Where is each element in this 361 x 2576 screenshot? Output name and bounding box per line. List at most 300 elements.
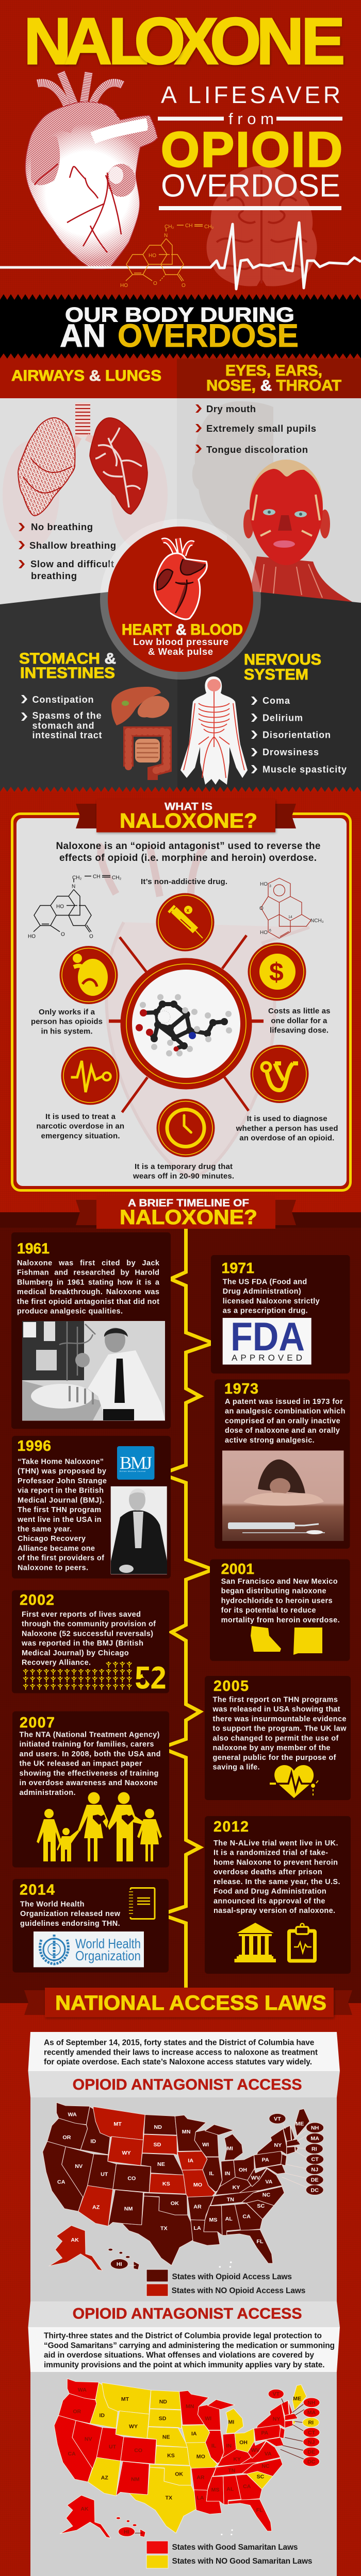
card: 2001: 2001 [221,1561,254,1578]
photo: professor [111,1486,167,1574]
card: 2014: Organization released new [20,1910,121,1918]
facts: narcotic overdose in an [36,1122,124,1130]
map: good samaritan: RI [308,2420,314,2426]
heading: AIRWAYS & LUNGS [11,367,161,384]
map: opioid access: SD [153,2143,161,2148]
text: good samaritan: aid in overdose situations. What offenses and violations are covered by [44,2351,314,2360]
card: 2005: general public for the purpose of [212,1754,336,1762]
faint heart backdrop [101,845,309,1177]
map: opioid access: CA [242,2214,251,2219]
facts [31,1007,338,1181]
faint head [192,401,273,592]
icon: heart [154,538,207,619]
card: 1961: the first opioid antagonist that did not [17,1298,159,1306]
map: opioid access: MT [113,2122,122,2127]
card: 1996: via report in the British [18,1487,104,1495]
facts: Costs as little as [268,1007,330,1015]
card: 1971: Drug Administration) [223,1287,301,1296]
text: access laws: recently amended their laws to increase access to naloxone as treatment [44,2048,318,2057]
facts: emergency situation. [41,1131,120,1141]
icon: naloxone structure: N [72,884,75,889]
ribbon: what is naloxone [76,800,296,833]
map: good samaritan: MA [307,2410,316,2416]
card: 2007: administration. [20,1789,75,1797]
map: good samaritan: ID [99,2413,105,2418]
card: 2007: 2007 [20,1715,55,1731]
map: good samaritan: MO [196,2454,205,2460]
faint lung shadow [3,440,168,549]
map: good samaritan: WI [205,2416,211,2422]
icon: morphine structure: 14 [288,916,292,919]
map: opioid access: AZ [92,2205,100,2210]
map: opioid access: LA [193,2226,201,2231]
map: good samaritan: NC [261,2464,270,2469]
map: opioid access: NC [262,2193,271,2198]
card: 1961 [11,1232,171,1429]
map: good samaritan: DC [307,2460,316,2465]
list: ENT symptoms: Extremely small pupils [206,423,316,434]
card: 2012: announced its approval of the [214,1897,325,1905]
map: good samaritan: SC [257,2475,265,2480]
divider with from: from [228,110,274,128]
heading: NERVOUS [244,651,321,668]
icon: nervous system body [180,676,248,785]
card: 2005: also changed to permit the use of [212,1734,338,1742]
map: opioid access: SC [257,2204,265,2209]
card: 1996: 1996 [18,1438,51,1454]
list: airway symptoms [19,521,116,581]
card: 1973: dose of naloxone and an orally [225,1427,340,1435]
map: opioid access: NV [75,2164,83,2170]
panel: nervous system [0,591,361,792]
intro text: effects of opioid (i.e. morphine and heroin) overdose. [59,853,317,863]
map: opioid access: ID [90,2139,96,2144]
card: 1996 [12,1436,171,1579]
map: good samaritan: KS [167,2453,175,2459]
icon: morphine structure: NCH₃ [310,918,324,924]
map: good samaritan: VA [265,2451,272,2457]
timeline spine [161,1229,213,1988]
logo: bmj [117,1446,155,1480]
facts: lifesaving dose. [270,1026,329,1035]
map: good samaritan: HI [124,2530,129,2535]
card: 2007: and users. In 2008, both the USA and [20,1750,161,1758]
map: opioid access: NH [311,2126,319,2131]
card: 2001: for its potential to reduce [221,1606,316,1615]
icon: california and new mexico [251,1626,322,1655]
card: 1961: Naloxone was first cited by Jack [17,1259,160,1267]
card: 2012: overdose deaths after prison [214,1868,322,1876]
text: access laws: for opiate overdose. Each state’s Naloxone access statutes vary widely. [44,2058,312,2066]
icon: naloxone molecule: HO [149,253,156,259]
list: nervous symptoms: Coma [262,696,290,706]
icon: naloxone structure: CH [93,874,100,880]
icon: morphine structure: O [259,906,264,911]
card: 1971 [211,1255,350,1374]
heading [19,650,116,682]
divider with from [158,110,342,128]
icon circle: syringe [156,893,215,951]
list: nervous symptoms: Drowsiness [262,747,319,757]
map: opioid access: MO [193,2182,202,2188]
icon: naloxone molecule: CH [185,223,192,229]
icon: naloxone structure: HO [56,904,64,910]
map: opioid access: DC [310,2188,319,2193]
card: 2014: The World Health [20,1900,85,1908]
ribbon: timeline: A BRIEF TIMELINE OF [128,1198,249,1209]
panel: what is naloxone [0,792,361,1212]
ribbon [24,1988,352,2018]
facts: Only works if a [39,1008,95,1016]
map: good samaritan: CA [243,2484,251,2490]
card: 2001: mortality from heroin overdose. [221,1616,340,1624]
title [24,5,345,78]
facts: one dollar for a [271,1016,327,1025]
map: good samaritan [54,2379,320,2538]
list: nervous symptoms: Delirium [262,713,303,723]
map: opioid access: WI [202,2143,209,2148]
icon: number 52 with heart: 52 [135,1660,166,1695]
card: 2014: guidelines endorsing THN. [20,1920,120,1928]
card: 1996: Chicago Recovery [18,1535,86,1543]
map: opioid access: MS [209,2217,218,2223]
icon: naloxone molecule: N [164,233,168,239]
panel: heart and blood circle [100,519,261,680]
map: good samaritan: MN [186,2404,194,2410]
map: opioid access: WV [251,2176,260,2181]
icon: morphine structure: 3 [269,885,271,888]
logo: fda approved: FDA [231,1314,305,1359]
card: 1996: “Take Home Naloxone” [18,1458,104,1466]
card: 2005: was released in USA showing that [212,1705,340,1714]
panel: stomach and intestines [0,591,177,792]
heading: OPIOID ANTAGONIST ACCESS [73,2076,302,2093]
map: good samaritan: ME [293,2396,301,2402]
card: 2002: Medical Journal) by Chicago [22,1649,129,1657]
card: 1973 [215,1380,350,1549]
card: map two [28,2301,340,2576]
card: 2001: hydrochloride to heroin users [221,1597,333,1605]
icon: lungs [18,402,147,516]
list: airway symptoms: Slow and difficult [30,558,114,569]
heading: NOSE, & THROAT [206,377,341,394]
list: nervous symptoms: Disorientation [262,730,331,740]
list: nervous symptoms: Muscle spasticity [262,765,347,775]
card: 2007: The NTA (National Treatment Agency) [20,1731,160,1739]
map: opioid access: WA [68,2112,77,2117]
text: symptoms: & Weak pulse [148,646,213,657]
card: 2002: Recovery Alliance. [22,1659,91,1667]
text: good samaritan: Thirty-three states and the District of Columbia provide legal protection to [44,2332,322,2340]
panel: eyes ears nose throat [177,353,361,604]
icon: clipboard [289,1924,315,1961]
map: good samaritan: CO [134,2448,142,2454]
map: opioid access: CO [127,2176,136,2181]
card: 1971: The US FDA (Food and [223,1278,307,1286]
card: 2005: naloxone by any member of the [212,1744,330,1752]
text: good samaritan: immunity provisions and the point at which immunity applies vary by state. [44,2361,325,2369]
icon: naloxone structure: CH₂ [72,875,81,881]
text: access laws: As of September 14, 2015, forty states and the District of Columbia have [44,2038,315,2047]
map: good samaritan: NY [273,2417,281,2422]
legend: opioid access: States with Opioid Access Laws [172,2273,292,2281]
connectors [109,936,264,1112]
logo: world health organization [34,1931,144,1967]
card: 2002 [12,1590,169,1695]
card: 1996: the same year. [18,1525,72,1533]
map: opioid access: DE [311,2178,319,2183]
icon: morphine structure: HO [260,930,268,936]
card: 1973: active strong analgesic. [225,1436,315,1445]
list: digestive symptoms: Spasms of the [32,710,101,721]
subtitle: opioid: OPIOID [161,122,342,177]
card: 2005: The first report on THN programs [212,1696,338,1704]
map: opioid access: AL [225,2217,233,2222]
map: good samaritan: NJ [308,2440,315,2445]
card: 2005 [205,1676,351,1800]
list: nervous symptoms [251,696,347,775]
ribbon: what is naloxone: WHAT IS [165,801,212,812]
card: 2012: release. In the same year, the U.S. [214,1878,340,1886]
map: good samaritan: OR [73,2410,81,2415]
map: good samaritan: CA [68,2452,76,2457]
card: 2012: 2012 [214,1819,249,1835]
icon: faint brain [206,166,317,286]
map: good samaritan: WY [129,2424,138,2430]
card: 1996: Naloxone to peers. [18,1564,88,1572]
panel: timeline [0,1196,361,2006]
photo: syringe and person [222,1451,343,1541]
facts: in his system. [41,1027,93,1036]
map: opioid access: TN [227,2197,234,2203]
card: 1973: 1973 [224,1381,258,1397]
map: opioid access: NJ [311,2167,318,2173]
map: opioid access: IN [225,2171,230,2177]
map: opioid access: VA [265,2179,273,2185]
map: opioid access: HI [117,2262,122,2267]
icon: digestive organs [111,687,169,780]
card: 1971: licensed Naloxone strictly [223,1297,320,1306]
card: 2002: First ever reports of lives saved [22,1611,141,1619]
icon circle: clock [157,1099,215,1157]
card: 2002: Naloxone (52 successful reversals) [22,1630,153,1638]
map: opioid access: OR [62,2135,71,2141]
panel: airways and lungs [0,353,177,604]
map: opioid access: MI [227,2146,233,2151]
title: N [24,5,71,78]
card: 2005: 2005 [214,1678,249,1694]
icon: naloxone structure: CH₂ [112,875,121,881]
icon: naloxone structure: O [89,934,93,940]
list: airway symptoms: Shallow breathing [29,540,116,551]
icon: naloxone molecule: O [153,281,157,286]
card: 1971: 1971 [222,1260,254,1277]
heading: EYES, EARS, [225,362,322,379]
heading [244,651,321,683]
map: good samaritan: FL [256,2508,263,2514]
map: opioid access: AK [71,2238,79,2243]
card: 1961: 1961 [17,1241,50,1257]
card: 2012: It is a randomized trial of take- [214,1849,328,1857]
icon: naloxone structure: HO [28,934,36,940]
map: opioid access: MA [310,2136,320,2142]
card: 2012: nasal-spray version of naloxone. [214,1907,335,1915]
subtitle: overdose: OVERDOSE [161,168,340,204]
heading: our body during an overdose: OUR BODY DURING [65,304,294,327]
map: opioid access: NE [157,2162,165,2167]
icon: family [37,1792,162,1861]
intro text [56,841,321,863]
icon: naloxone molecule: O [182,283,186,289]
legend: good samaritan: States with NO Good Samaritan Laws [172,2557,313,2566]
icon: muscle head [243,460,356,604]
card: 1996: of the first providers of [18,1554,104,1563]
map: good samaritan: WA [78,2387,87,2393]
map: good samaritan: OK [175,2472,184,2478]
heading: SYSTEM [244,666,308,683]
map: opioid access: KY [233,2185,240,2191]
legend: opioid access [146,2269,305,2296]
card: 2001: San Francisco and New Mexico [221,1578,338,1586]
map: good samaritan: OH [239,2441,248,2446]
icon: notebook [127,1888,155,1919]
map: opioid access: PA [262,2158,269,2163]
map: opioid access: VT [274,2116,282,2122]
card: 2002: was reported in the BMJ (British [21,1639,143,1648]
panel: header [0,0,361,300]
map: opioid access: CA [57,2180,65,2185]
panel: national access laws [0,1988,361,2576]
icon: molecule model [121,958,252,1089]
map: good samaritan: SD [159,2416,166,2422]
icon: morphine structure [259,878,324,938]
card: 2001 [210,1559,350,1661]
text: good samaritan: “Good Samaritans” carrying and administering the medication or summoning [44,2341,335,2350]
map: good samaritan: ND [159,2400,167,2405]
map: good samaritan: MS [211,2487,220,2493]
facts: whether a person has used [236,1124,338,1133]
list: digestive symptoms: Constipation [32,694,94,705]
map: good samaritan: MI [228,2420,234,2426]
logo: world health organization: World Health [75,1936,141,1952]
ribbon: what is naloxone: NALOXONE? [120,810,257,833]
icon: government building [234,1923,276,1962]
map: good samaritan: DE [307,2450,315,2455]
legend: good samaritan: States with Good Samaritan Laws [172,2543,298,2552]
map: opioid access: OH [239,2168,247,2173]
text: non addictive: It’s non-addictive drug. [141,877,227,886]
map: good samaritan: CT [308,2430,316,2436]
map: opioid access: KS [162,2181,170,2187]
map: opioid access: FL [256,2239,264,2245]
text: good samaritan [44,2332,335,2369]
title: L [108,5,149,78]
card: 2012: home Naloxone to prevent heroin [214,1859,338,1867]
heading: OPIOID ANTAGONIST ACCESS [73,2305,302,2322]
card: 2007 [12,1711,169,1868]
heading: heart and blood: HEART & BLOOD [122,621,243,638]
icon: morphine structure: HO [260,882,268,887]
list: airway symptoms: No breathing [31,521,93,532]
list: airway symptoms: breathing [31,570,77,581]
logo: fda approved: APPROVED [232,1353,302,1363]
card: 2005: to support the program. The UK law [212,1725,347,1733]
map: opioid access: MN [182,2130,190,2135]
map: good samaritan: TX [166,2496,172,2501]
facts: person has opioids [31,1017,103,1026]
text: access laws [44,2038,318,2066]
card: 2002: through the community provision of [22,1620,156,1629]
card: 1996: Alliance became one [18,1545,95,1553]
list: ENT symptoms [195,403,316,455]
facts: It is a temporary drug that [135,1162,233,1171]
heading: INTESTINES [20,665,115,682]
text: symptoms [133,636,228,657]
icon: naloxone structure [28,874,121,940]
icon: naloxone molecule: CH₂ [204,224,214,230]
heartbeat line [0,223,361,289]
icon: naloxone molecule: CH₂ [165,224,174,230]
icon circle: dollar [248,943,306,1001]
heading: our body during an overdose: AN [60,318,106,354]
intro text: Naloxone is an “opioid antagonist” used to reverse the [56,841,321,852]
list: ENT symptoms: Tongue discoloration [206,444,308,455]
heading: our body during an overdose: OVERDOSE [118,318,299,354]
heading: STOMACH & [19,650,116,667]
heading: our body during an overdose [60,304,299,354]
map: opioid access: RI [311,2147,317,2152]
map: opioid access: IL [209,2171,214,2177]
map: good samaritan: AR [196,2475,205,2481]
card: 1961: medical breakthrough. Naloxone was [17,1288,159,1296]
card: 2001: began distributing naloxone [221,1587,326,1596]
card: 2007: showing the effectiveness of training [20,1769,159,1777]
icon circle: fetus [60,946,118,1004]
legend: opioid access: States with NO Opioid Access Laws [172,2286,305,2295]
card: 2014: 2014 [20,1882,55,1898]
logo: bmj: British Medical Journal [120,1470,145,1472]
icon circle: stethoscope [251,1045,308,1103]
card: 1996: The first THN program [18,1506,101,1514]
card: 2007: the UK released an impact paper [20,1760,142,1768]
card: 1961: produce analgesic qualities. [17,1308,123,1316]
card: 2012: Food and Drug Administration [214,1888,326,1896]
icon: naloxone molecule [120,223,214,289]
card: 1973: A patent was issued in 1973 for [225,1398,343,1406]
list: digestive symptoms: stomach and [32,720,94,731]
icon: engraved heart [25,72,158,269]
card: 1996: went live in the USA in [17,1516,101,1524]
map: good samaritan: TN [228,2468,235,2474]
facts: It is used to diagnose [247,1114,327,1123]
card [12,814,351,1190]
subtitle: a lifesaver: A LIFESAVER [161,81,340,108]
map: good samaritan: WV [251,2448,260,2453]
map: good samaritan: MT [121,2397,129,2402]
title: A [64,5,112,78]
map: good samaritan: LA [196,2496,204,2501]
map: opioid access: UT [101,2172,108,2178]
icon: heart ecg [270,1765,318,1798]
map: opioid access: ND [154,2125,162,2130]
facts: an overdose of an opioid. [239,1133,334,1143]
icon circle: ecg [61,1047,120,1105]
ribbon: timeline [76,1196,296,1229]
card: map one [28,2032,340,2301]
map: opioid access: TX [160,2226,168,2231]
card: 1961: Fishman and researched by Harold [17,1269,159,1277]
map: good samaritan: NE [162,2435,170,2441]
